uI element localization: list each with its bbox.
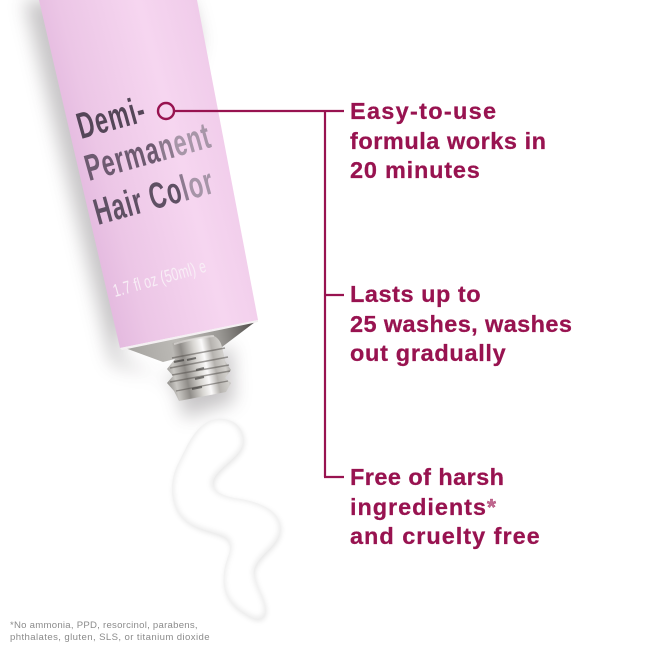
callout: lasts up to 25 washes: out gradually	[350, 340, 506, 366]
callout: free of harsh ingredients: Free of harsh	[350, 464, 504, 490]
tube label text: Hair Color	[89, 160, 219, 233]
product swatch	[172, 419, 282, 622]
tube body	[39, 0, 258, 350]
product illustration	[18, 0, 282, 622]
callout: easy to use: Easy-to-use	[350, 98, 497, 124]
callout: free of harsh ingredients: and cruelty free	[350, 523, 541, 549]
footnote	[10, 620, 210, 643]
callout: easy to use: formula works in	[350, 128, 547, 154]
callout: lasts up to 25 washes: Lasts up to	[350, 281, 481, 307]
tube label text: Demi-	[72, 88, 150, 147]
tube nozzle	[125, 322, 255, 401]
callout: lasts up to 25 washes	[350, 281, 572, 366]
tube volume text: 1.7 fl oz (50ml) e	[111, 257, 209, 302]
callout: free of harsh ingredients: ingredients*	[350, 494, 497, 520]
tube label text: Permanent	[80, 114, 215, 189]
footnote: *No ammonia, PPD, resorcinol, parabens,	[10, 620, 198, 631]
callout: lasts up to 25 washes: 25 washes, washes	[350, 311, 572, 337]
tube label text	[72, 88, 219, 233]
footnote: phthalates, gluten, SLS, or titanium dioxide	[10, 632, 210, 643]
callout: easy to use	[350, 98, 547, 183]
tube shadow	[24, 0, 234, 418]
callout: free of harsh ingredients	[350, 464, 541, 550]
callout: easy to use: 20 minutes	[350, 157, 481, 183]
